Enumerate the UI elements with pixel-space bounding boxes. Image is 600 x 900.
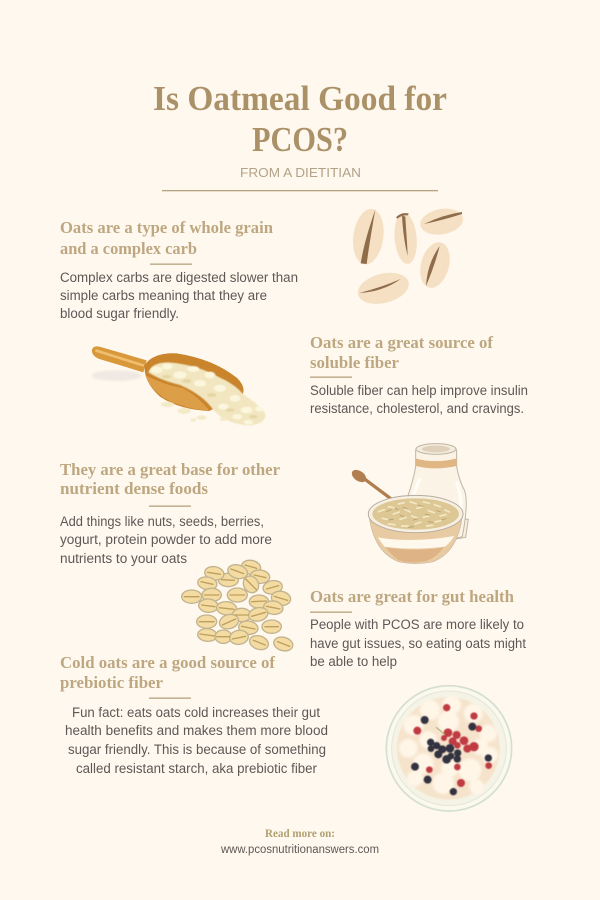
heading: gut health: Oats are great for gut health — [310, 587, 514, 606]
heading: soluble fiber: Oats are a great source of — [310, 333, 494, 352]
icon: porridge bowl with berries — [386, 686, 512, 811]
body: whole grain — [60, 270, 298, 321]
section: gut health — [310, 587, 526, 669]
body: prebiotic fiber: called resistant starch, aka prebiotic fiber — [76, 761, 317, 776]
dark berries — [411, 716, 492, 795]
heading: prebiotic fiber: Cold oats are a good source of — [60, 653, 276, 672]
heading: soluble fiber — [310, 333, 494, 372]
milk jar — [408, 444, 468, 547]
section: prebiotic fiber — [60, 653, 328, 776]
heading: nutrient base: They are a great base for other — [60, 460, 280, 479]
spoon — [350, 467, 392, 499]
title — [153, 79, 447, 159]
bowl — [368, 495, 463, 563]
icon: wooden scoop of oats — [92, 346, 265, 426]
title: Is Oatmeal Good for — [153, 79, 447, 118]
footer: read more: www.pcosnutritionanswers.com — [220, 844, 379, 856]
body: gut health — [310, 617, 526, 669]
heading: whole grain: and a complex carb — [60, 239, 197, 258]
footer: read more: Read more on: — [265, 828, 335, 840]
heading: soluble fiber: soluble fiber — [310, 353, 399, 372]
body: soluble fiber: Soluble fiber can help improve insulin — [310, 383, 528, 398]
body: prebiotic fiber: Fun fact: eats oats cold increases their gut — [72, 705, 320, 720]
section: soluble fiber — [310, 333, 528, 416]
body: whole grain: blood sugar friendly. — [60, 306, 179, 321]
section: nutrient base — [60, 460, 280, 566]
body: prebiotic fiber: health benefits and makes them more blood — [65, 723, 328, 738]
red berries — [413, 704, 492, 787]
heading: whole grain: Oats are a type of whole grain — [60, 218, 273, 237]
body: gut health: have gut issues, so eating oats might — [310, 636, 526, 651]
title: PCOS? — [252, 120, 348, 159]
icon: five oat grains — [350, 205, 465, 309]
body: gut health: People with PCOS are more likely to — [310, 617, 524, 632]
body: nutrient base: yogurt, protein powder to add more — [60, 532, 272, 547]
body: nutrient base: nutrients to your oats — [60, 551, 187, 566]
subtitle: FROM A DIETITIAN — [240, 166, 361, 180]
body: whole grain: simple carbs meaning that they are — [60, 288, 267, 303]
heading: whole grain — [60, 218, 273, 258]
body: whole grain: Complex carbs are digested slower than — [60, 270, 298, 285]
body: gut health: be able to help — [310, 654, 397, 669]
icon: bowl of oats with jar and spoon — [350, 444, 468, 563]
heading: prebiotic fiber — [60, 653, 276, 692]
heading: nutrient base: nutrient dense foods — [60, 479, 209, 498]
section: whole grain — [60, 218, 298, 321]
body: soluble fiber: resistance, cholesterol, and cravings. — [310, 401, 524, 416]
porridge lumps — [399, 696, 498, 794]
heading: nutrient base — [60, 460, 280, 498]
body: soluble fiber — [310, 383, 528, 416]
icon: scattered oat flakes — [182, 559, 294, 653]
body: prebiotic fiber — [65, 705, 328, 776]
body: nutrient base: Add things like nuts, seeds, berries, — [60, 514, 264, 529]
body: prebiotic fiber: sugar friendly. This is because of something — [68, 742, 326, 757]
footer: read more — [220, 828, 379, 856]
heading: prebiotic fiber: prebiotic fiber — [60, 673, 163, 692]
body: nutrient base — [60, 514, 272, 566]
